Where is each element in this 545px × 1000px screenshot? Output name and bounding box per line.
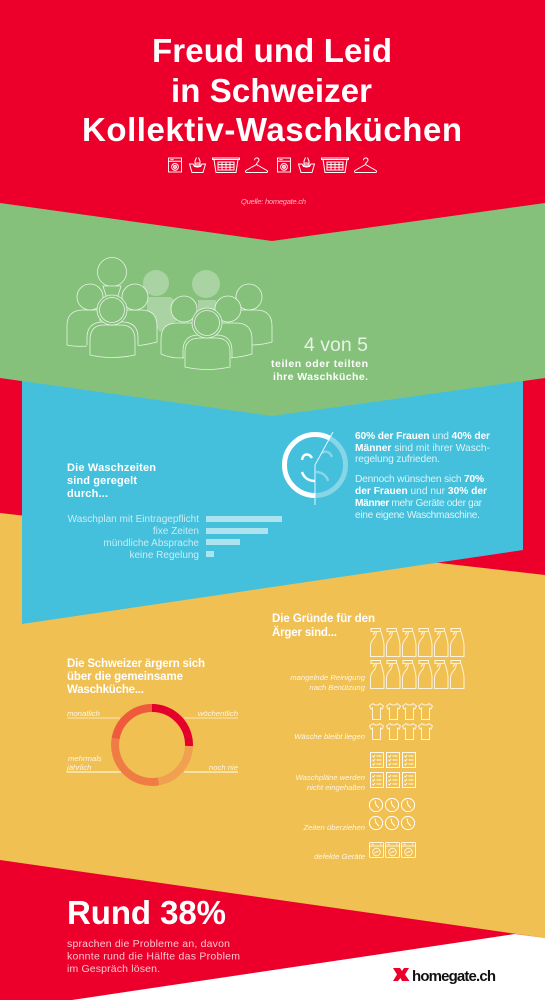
text block: satisfaction: Männer mehr Geräte oder gar (355, 498, 483, 509)
donut chart: frequency (115, 708, 189, 782)
background: white corner (72, 934, 545, 1000)
bar chart: Waschzeiten: mündliche Absprache (103, 538, 199, 549)
stat: 4 von 5: ihre Waschküche. (273, 371, 368, 383)
bar chart: Waschzeiten: keine Regelung (130, 550, 199, 561)
stat: 4 von 5 (271, 334, 368, 383)
label: defekte Geräte: defekte Geräte (314, 852, 365, 861)
heading: Gründe (272, 613, 375, 639)
panel: blue section (22, 370, 523, 624)
text block: conclusion: im Gespräch lösen. (67, 963, 160, 975)
donut labels: mehrmals (68, 754, 102, 763)
label: mangelnde Reinigung: mangelnde Reinigung (290, 673, 366, 682)
donut labels (66, 709, 238, 772)
label: mangelnde Reinigung: nach Benützung (309, 683, 366, 692)
logo: homegate.ch: homegate.ch (412, 968, 496, 985)
bar chart: Waschzeiten: fixe Zeiten (153, 526, 199, 537)
heading: Schweizer ärgern sich: Die Schweizer ärgern sich (67, 658, 205, 670)
label: Waschpläne (295, 773, 365, 792)
label: Waschpläne: nicht eingehalten (307, 783, 365, 792)
stat: 4 von 5: teilen oder teilten (271, 358, 368, 370)
title: in Schweizer (171, 72, 372, 109)
icons: clocks (369, 798, 415, 830)
text block: satisfaction: Männer sind mit ihrer Wasch- (355, 443, 490, 454)
heading: Waschzeiten: Die Waschzeiten (67, 462, 156, 474)
text block: satisfaction: der Frauen und nur 30% der (355, 486, 487, 497)
heading: Gründe: Die Gründe für den (272, 613, 375, 625)
title (82, 32, 462, 148)
heading: Schweizer ärgern sich: Waschküche... (67, 684, 144, 696)
stat: Rund 38%: Rund 38% (67, 894, 226, 931)
text block: satisfaction: Dennoch wünschen sich 70% (355, 474, 484, 485)
text block: satisfaction: 60% der Frauen und 40% der (355, 431, 490, 442)
donut labels: wöchentlich (198, 709, 238, 718)
text block: satisfaction: eine eigene Waschmaschine. (355, 510, 480, 521)
text block: satisfaction (355, 431, 490, 521)
label: Zeiten überziehen: Zeiten überziehen (302, 823, 365, 832)
donut labels: jährlich (66, 763, 91, 772)
heading: Waschzeiten (67, 462, 156, 500)
title: Freud und Leid (152, 32, 392, 69)
text block: conclusion: sprachen die Probleme an, davon (67, 938, 230, 950)
text block: conclusion: konnte rund die Hälfte das Problem (67, 950, 240, 962)
heading: Schweizer ärgern sich (67, 658, 205, 696)
heading: Gründe: Ärger sind... (272, 626, 337, 639)
icon: happy and sad face (284, 432, 346, 505)
icons: checklists (370, 752, 416, 788)
bar chart: Waschzeiten: Waschplan mit Eintragepflicht (68, 514, 199, 525)
label: Wäsche bleibt liegen: Wäsche bleibt liegen (294, 732, 365, 741)
icon: group of people (67, 258, 272, 370)
heading: Waschzeiten: sind geregelt (67, 475, 137, 487)
donut labels: noch nie (209, 763, 238, 772)
text block: satisfaction: regelung zufrieden. (355, 454, 440, 465)
icon row: laundry (168, 158, 377, 172)
icons: spray bottles (370, 628, 464, 688)
title: Kollektiv-Waschküchen (82, 111, 462, 148)
panel: green section (0, 203, 545, 416)
source note: Quelle: homegate.ch (241, 197, 306, 206)
donut labels: monatlich (67, 709, 100, 718)
label: Waschpläne: Waschpläne werden (295, 773, 365, 782)
icons: broken washers (370, 842, 416, 858)
stat: 4 von 5: 4 von 5 (304, 334, 368, 356)
text block: conclusion (67, 938, 240, 975)
icons: shirts (370, 704, 432, 740)
label: mangelnde Reinigung (290, 673, 366, 692)
background: yellow band (0, 513, 545, 938)
heading: Waschzeiten: durch... (67, 488, 108, 500)
heading: Schweizer ärgern sich: über die gemeinsame (67, 671, 183, 683)
bar chart: Waschzeiten (68, 514, 282, 561)
